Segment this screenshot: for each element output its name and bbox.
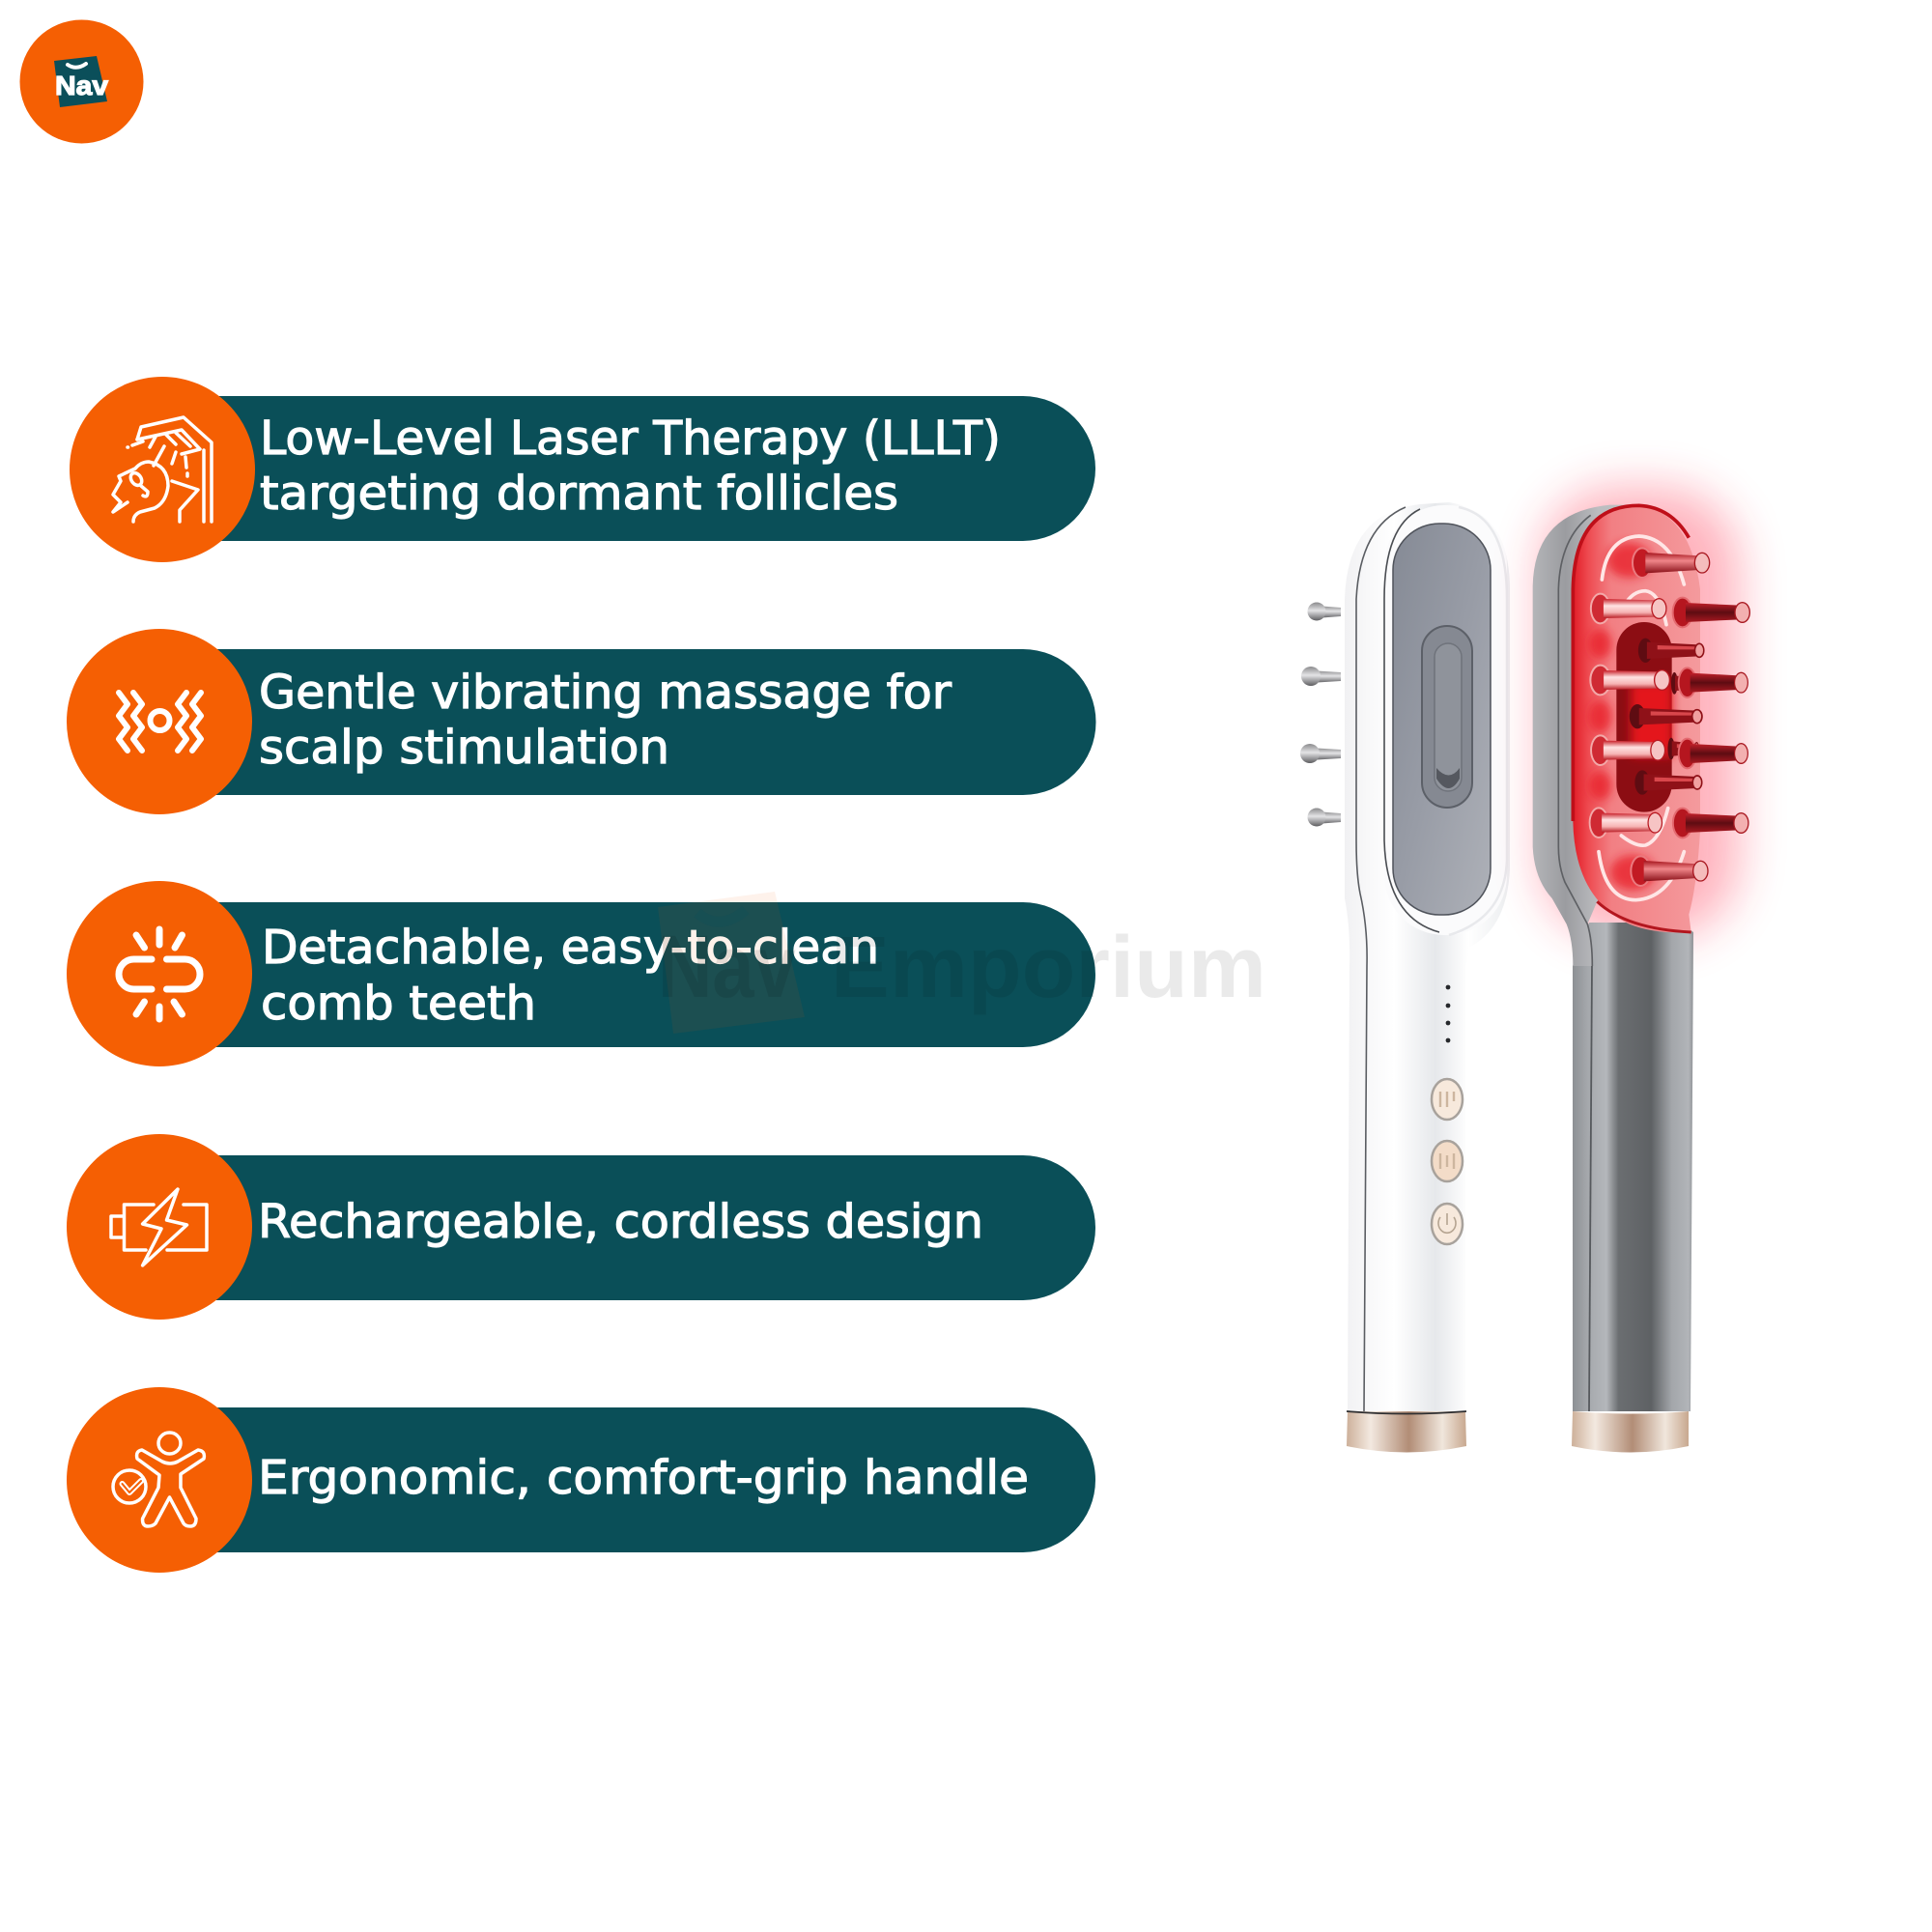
comb pins side view <box>1300 603 1341 827</box>
right dark pins <box>1673 598 1749 838</box>
product: grey comb device with red light <box>1533 488 1749 1453</box>
logo badge <box>19 19 143 143</box>
orange icon circle <box>67 1134 252 1320</box>
shell seam <box>1558 515 1592 966</box>
control buttons <box>1432 1079 1463 1244</box>
front light pins <box>1590 594 1669 838</box>
icon: person with check <box>113 1433 204 1526</box>
feature text: comb teeth <box>261 977 536 1031</box>
icon: broken link <box>119 929 200 1019</box>
pill background <box>193 396 1095 541</box>
feature text: scalp stimulation <box>259 721 669 775</box>
pill background <box>193 1407 1095 1552</box>
icon: laser cap over head <box>113 417 212 522</box>
watermark: Nav Emporium: Nav <box>658 918 796 1016</box>
gold base <box>1572 1411 1689 1453</box>
slider <box>1422 626 1472 808</box>
panel: rechargeable cordless <box>67 1134 1095 1320</box>
watermark: Nav Emporium <box>658 892 1266 1034</box>
feature text <box>259 666 952 775</box>
center slot <box>1616 622 1672 812</box>
seam line <box>1356 507 1406 1411</box>
head rim <box>1384 505 1507 935</box>
feature text: Low-Level Laser Therapy (LLLT) <box>260 412 1001 466</box>
feature text <box>260 412 1001 521</box>
icon: battery with bolt <box>111 1189 207 1265</box>
feature text: Ergonomic, comfort-grip handle <box>258 1451 1029 1505</box>
feature text <box>261 921 879 1031</box>
body silhouette <box>1345 502 1510 1411</box>
white arcs <box>1599 536 1684 900</box>
indicator dots <box>1446 985 1450 1042</box>
comb head in source coordinates <box>1533 505 1749 966</box>
panel: vibrating massage <box>67 629 1095 814</box>
plate red rim <box>1573 505 1689 821</box>
feature text: targeting dormant follicles <box>260 467 898 521</box>
grey panel <box>1393 524 1491 915</box>
orange icon circle <box>67 1387 252 1573</box>
top and bottom pins <box>1631 548 1710 886</box>
logo badge: Nav <box>55 71 108 100</box>
panel: low-level laser therapy <box>70 377 1095 562</box>
product: white comb device <box>1300 502 1510 1453</box>
red glow <box>1541 488 1739 937</box>
orange icon circle <box>70 377 255 562</box>
gold base <box>1347 1411 1466 1453</box>
feature text: Rechargeable, cordless design <box>258 1195 983 1249</box>
handle <box>1573 923 1693 1411</box>
red light patches <box>1589 543 1655 891</box>
watermark: Nav Emporium: Emporium <box>831 920 1266 1016</box>
orange icon circle <box>67 881 252 1066</box>
feature text: Gentle vibrating massage for <box>259 666 952 720</box>
orange icon circle <box>67 629 252 814</box>
rear small pins <box>1630 639 1704 795</box>
seam on handle <box>1589 966 1592 1411</box>
panel: ergonomic handle <box>67 1387 1095 1573</box>
icon: vibration waves <box>119 693 201 751</box>
face plate <box>1573 505 1700 932</box>
pill background <box>193 902 1095 1047</box>
plate lower lip <box>1597 901 1691 932</box>
pill background <box>193 1155 1095 1300</box>
panel: detachable comb teeth <box>67 881 1095 1066</box>
pill background <box>193 649 1095 795</box>
back shell <box>1533 505 1642 966</box>
feature text: Detachable, easy-to-clean <box>262 921 879 975</box>
